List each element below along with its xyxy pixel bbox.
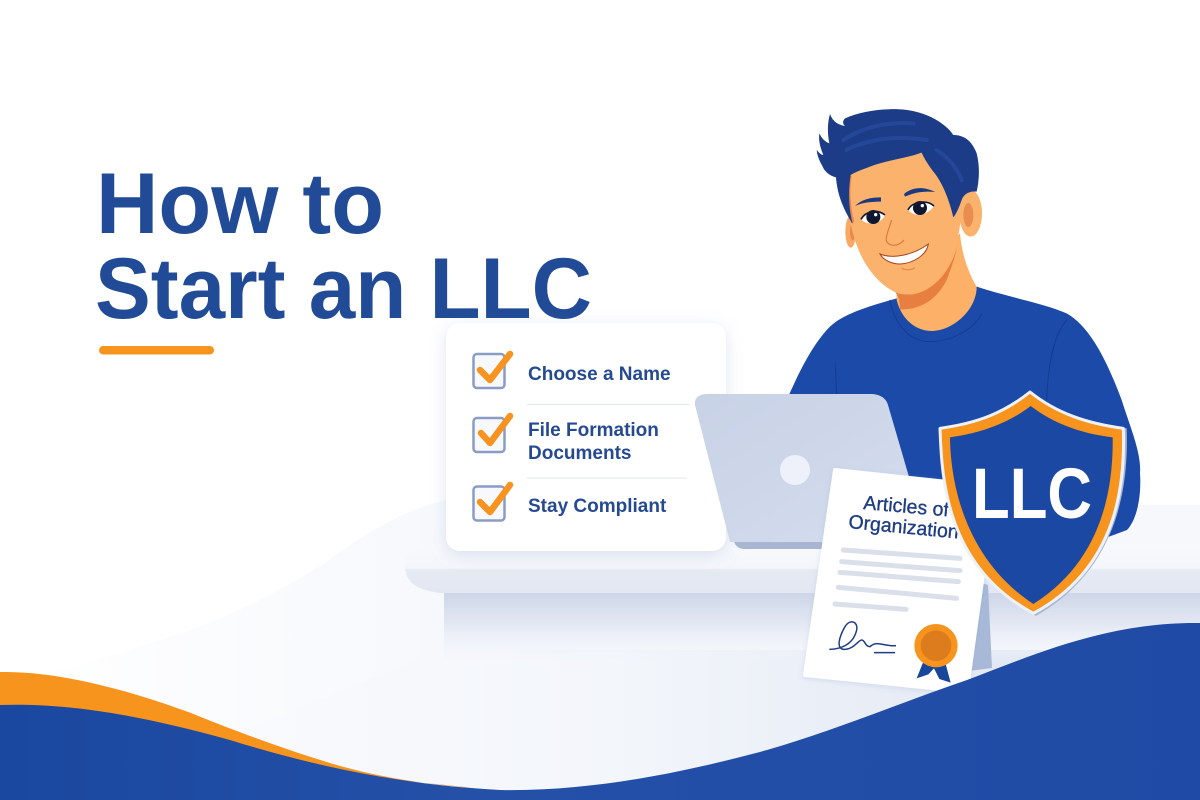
smile: [880, 244, 928, 264]
bottom wave: navy: [0, 623, 1200, 800]
document heading: Articles of: [863, 492, 950, 521]
shield orange border: [940, 392, 1124, 613]
checklist item: Choose a Name: Choose a Name: [528, 364, 671, 385]
document text lines: [835, 550, 960, 609]
right ear: [959, 190, 982, 237]
background hill: [0, 500, 1200, 800]
bottom wave: orange accent: [0, 672, 475, 788]
hair: [817, 109, 979, 224]
panel: checklist: [446, 323, 726, 551]
laptop: [695, 394, 928, 549]
left ear: [845, 216, 856, 248]
checklist item: File Formation Documents: File Formation: [528, 420, 659, 441]
checklist item: File Formation Documents: [474, 416, 659, 464]
eyebrows: [855, 188, 935, 206]
shield label: LLC: [972, 455, 1092, 534]
title: [95, 156, 592, 337]
right eye: [908, 201, 934, 215]
title: How to: [96, 156, 384, 252]
neck: [897, 233, 977, 331]
checklist item: File Formation Documents: Documents: [528, 443, 631, 464]
shield navy fill: [950, 406, 1113, 604]
left eye: [861, 210, 885, 224]
shield shadow: [942, 392, 1127, 616]
checklist item: Stay Compliant: [474, 485, 667, 520]
checklist item: Choose a Name: [474, 354, 671, 388]
person: [787, 109, 1140, 540]
sweater: [787, 287, 1140, 540]
document heading: [848, 492, 960, 544]
signature: [829, 622, 896, 653]
floor: [230, 650, 1200, 800]
document heading: Organization: [848, 511, 960, 544]
neck shadow: [895, 240, 959, 309]
title: Start an LLC: [95, 241, 592, 337]
lip shade: [902, 268, 915, 270]
icon: seal ribbon: [914, 624, 958, 683]
face edge shade: [849, 176, 853, 223]
icon: LLC shield: [940, 392, 1127, 616]
title underline: [99, 346, 214, 354]
desk: [405, 545, 1200, 663]
checklist item: Stay Compliant: Stay Compliant: [528, 496, 667, 517]
face: [847, 150, 962, 294]
document stand: [969, 583, 992, 671]
sweater seams: [835, 300, 1067, 400]
document: Articles of Organization: [805, 470, 995, 692]
nose: [886, 220, 904, 245]
